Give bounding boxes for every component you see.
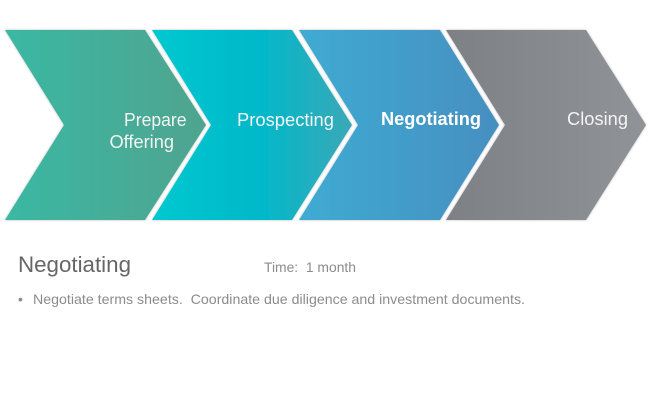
chevron: Closing bbox=[446, 30, 646, 220]
label: Negotiating: Negotiating bbox=[381, 109, 481, 129]
chevron: Prepare Offering bbox=[5, 30, 206, 220]
bullet description: • bbox=[18, 291, 23, 307]
bullet description: Negotiate terms sheets. Coordinate due diligence and investment documents. bbox=[33, 291, 525, 307]
time estimate: Time: 1 month bbox=[264, 259, 356, 275]
chevron: Negotiating bbox=[299, 30, 499, 220]
label: Closing: Closing bbox=[567, 109, 628, 129]
heading: Negotiating: Negotiating bbox=[18, 252, 131, 277]
label: Prepare Offering: Offering bbox=[110, 132, 174, 152]
chevron: Prospecting bbox=[152, 30, 352, 220]
label: Prepare Offering: Prepare bbox=[124, 110, 186, 130]
label: Prepare Offering bbox=[110, 110, 186, 152]
label: Prospecting: Prospecting bbox=[237, 110, 334, 130]
